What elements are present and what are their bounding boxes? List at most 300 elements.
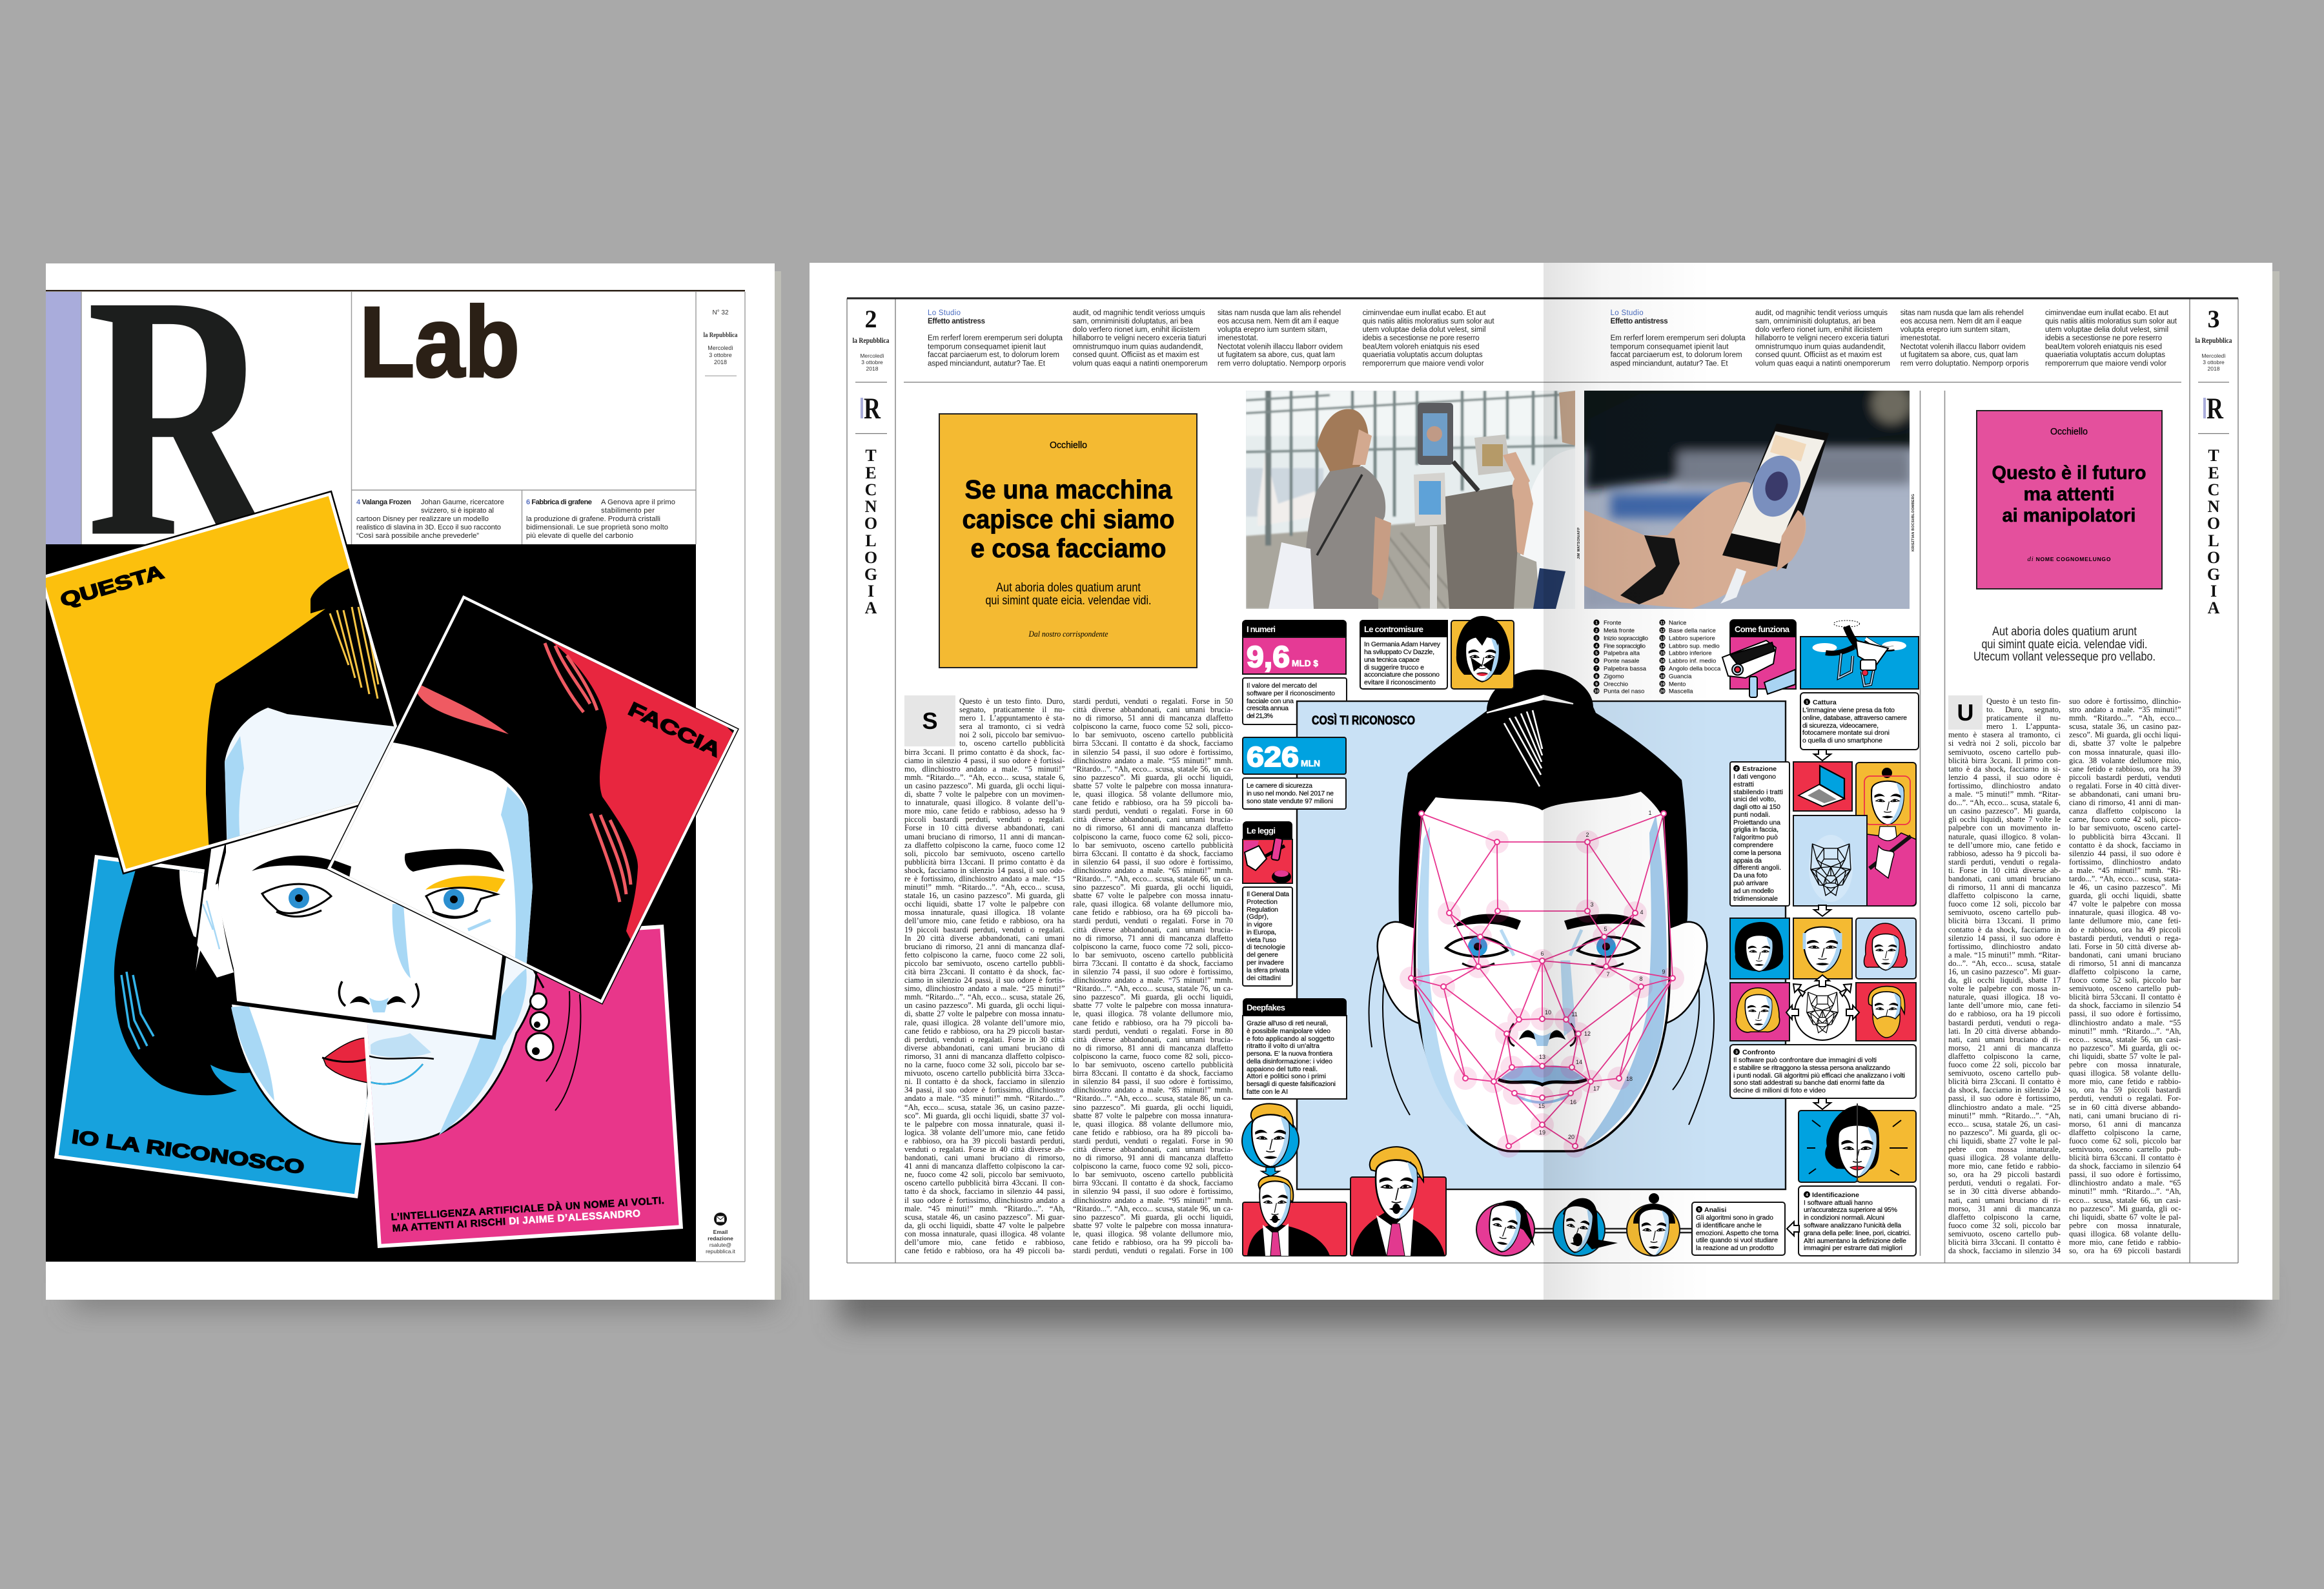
infographic: main panel <box>1297 670 1786 1189</box>
illustration: 3D wireframe <box>1793 815 1867 906</box>
illustration: dazzle face <box>1451 616 1514 689</box>
box: I numeri: software per il riconoscimento <box>1247 690 1335 697</box>
photo credits: JIM WATSON/AFP <box>1577 528 1581 559</box>
drop cap: U: U <box>1957 699 1974 726</box>
box: I numeri: del 21,3% <box>1247 712 1273 720</box>
section label vertical: C <box>2208 480 2219 499</box>
legend: node points: Labbro inferiore <box>1669 650 1712 657</box>
box: step 5 Analisi: emozioni. Aspetto che torna <box>1696 1229 1779 1237</box>
box: step 2 Estrazione: appaia da <box>1733 857 1762 865</box>
text block: Lo Studio right <box>1611 309 2177 368</box>
section label vertical: N <box>2208 497 2220 516</box>
text block: Lo Studio right: rem verro doluptatio. Nemporp orporis <box>1901 360 2029 368</box>
text block: Lo Studio right: asped minciandunt, autatur? Tae. Et <box>1611 360 1728 368</box>
text block: Lo Studio left: dolo verfero rionet ium, enihit iliciistem <box>1073 326 1200 334</box>
box: Deepfakes: persona. E' la nuova frontiera <box>1247 1050 1332 1058</box>
box: step 2 Estrazione: come la persona <box>1733 849 1781 857</box>
legend: node points: 6 <box>1595 659 1598 663</box>
illustration: face with mesh <box>1369 670 1714 1158</box>
box: step 2 Estrazione: unici del volto, <box>1733 795 1776 803</box>
box: step 1 Cattura <box>1800 693 1919 750</box>
legend: node points: 11 <box>1660 620 1665 625</box>
box: step 2 Estrazione: può arrivare <box>1733 879 1768 887</box>
teaser: Valanga Frozen: cartoon Disney per realizzare un modello <box>356 515 489 523</box>
legend: node points: 14 <box>1660 644 1665 648</box>
text block: Lo Studio left: Effetto antistress <box>928 318 985 325</box>
phone <box>1722 424 1829 569</box>
legend: node points: 9 <box>1595 682 1598 686</box>
box: Le contromisure: evitare il riconoscimento <box>1364 679 1436 686</box>
issue info: 3 ottobre <box>709 352 732 358</box>
section label vertical <box>2207 446 2220 617</box>
spine shading <box>1544 263 1711 1300</box>
box: step 2 Estrazione: punti nodali. <box>1733 811 1770 819</box>
text block: Lo Studio right: faccat parciaerum est, to dolorum lorem <box>1611 351 1742 359</box>
text block: Lo Studio right: temporum consequamet ipienit laut <box>1611 343 1729 351</box>
node numbers: 20 <box>1568 1134 1575 1140</box>
legend: node points: 15 <box>1660 651 1665 655</box>
panel: pink headline box: ai manipolatori <box>2003 505 2135 526</box>
box: I numeri: Il valore del mercato del <box>1247 682 1317 690</box>
node numbers: 1 <box>1648 810 1652 816</box>
box: step 4 Identificazione: in condizioni normali. Alcuni <box>1804 1214 1884 1222</box>
legend: node points: 2 <box>1595 628 1598 633</box>
text block: Lo Studio right: quis natiis alitiis moloratius sum solor aut <box>2045 318 2177 325</box>
box: step 3 Confronto: Confronto <box>1742 1049 1775 1056</box>
panel: yellow headline box: Se una macchina <box>964 475 1173 504</box>
illustration: gavel <box>1243 837 1292 883</box>
box: Le contromisure: di suggerire trucco e <box>1364 664 1424 671</box>
text block: Lo Studio right: quaeriatia voluptatis accum doluptas <box>2045 351 2165 359</box>
sidebar: page 3: Mercoledì <box>2201 353 2226 359</box>
card: yellow <box>46 491 397 874</box>
text block: Lo Studio left: volum quas eaqui a natinti onemporerum <box>1073 360 1208 368</box>
legend: node points: Punta del naso <box>1604 688 1644 695</box>
panel: yellow headline box: Occhiello <box>1050 440 1087 451</box>
panel: yellow headline box: e cosa facciamo <box>971 533 1166 563</box>
box: step 3 Confronto: 3 <box>1735 1050 1738 1055</box>
issue info: 2018 <box>714 359 727 365</box>
legend: node points: 16 <box>1660 659 1665 663</box>
section label vertical: A <box>2208 599 2220 617</box>
box: Le leggi: la sfera privata <box>1247 967 1289 974</box>
legend: node points: 18 <box>1660 674 1665 679</box>
box: step 3 Confronto: e stabilire se ritraggono la stessa persona analizzando <box>1733 1064 1890 1072</box>
node numbers: 6 <box>1540 950 1544 957</box>
legend: node points: Labbro sup. medio <box>1669 643 1720 650</box>
legend: node points: Fine sopracciglio <box>1604 643 1646 650</box>
node numbers: 4 <box>1640 909 1644 916</box>
sidebar: page 2: 2018 <box>866 365 879 372</box>
text block: right standfirst <box>1973 625 2156 664</box>
contact: repubblica.it <box>706 1248 736 1255</box>
node numbers: 14 <box>1576 1059 1582 1065</box>
text block: Lo Studio left: sam, omniminisiti doluptatus, ari bea <box>1073 318 1193 325</box>
box: Deepfakes: ritratto il volto di un'altra <box>1247 1042 1320 1050</box>
contact: redazione <box>708 1235 733 1242</box>
node numbers: 7 <box>1606 971 1610 978</box>
legend: node points: Narice <box>1669 620 1686 626</box>
arrow: step 4 to 5 <box>1787 1222 1799 1236</box>
legend: node points: Labbro inf. medio <box>1669 657 1716 665</box>
box: step 2 Estrazione: comprendere <box>1733 841 1773 849</box>
box: Come funziona <box>1722 620 1796 697</box>
legend: node points: Mento <box>1669 681 1686 688</box>
legend: node points: Base della narice <box>1669 628 1716 634</box>
box: step 2 Estrazione: Proiettando una <box>1733 819 1780 826</box>
teaser: Fabbrica di grafene <box>526 498 675 540</box>
illustration: split face <box>1799 1103 1916 1182</box>
text block: Lo Studio left: audit, od magnihic tendit verioss umquis <box>1073 309 1205 317</box>
kiosk <box>1442 483 1522 609</box>
issue info: Mercoledì <box>708 345 733 351</box>
text block: Lo Studio right: consed quunt. Officiist as et maxim est <box>1755 351 1882 359</box>
node numbers: 10 <box>1545 1009 1551 1016</box>
contact: rsalute@ <box>709 1242 731 1248</box>
box: I numeri <box>1242 620 1347 724</box>
text block: Lo Studio left: eos accusa nem. Nem dit am il eaque <box>1218 318 1339 325</box>
box: Le leggi <box>1243 821 1292 986</box>
box: step 5 Analisi: utile quando si vuol studiare <box>1696 1236 1778 1244</box>
box: step 4 Identificazione: immagini per estrarre dati migliori <box>1804 1244 1902 1252</box>
text block: Lo Studio right: sitas nam nusda que lam alis rehendel <box>1901 309 2024 317</box>
drop cap: S: S <box>922 708 937 734</box>
section label vertical: O <box>2207 514 2220 533</box>
section label vertical: I <box>868 582 874 600</box>
body text: right column 2 <box>2069 697 2181 1255</box>
box: step 2 Estrazione: Da una foto <box>1733 872 1768 879</box>
box: 626 mln: Le camere di sicurezza <box>1247 782 1312 790</box>
issue info <box>704 309 738 376</box>
card title: FACCIA <box>625 699 724 761</box>
text block: Lo Studio right: ut fugitatem sa abore, cus, quat lam <box>1901 351 2018 359</box>
box: Come funziona: Come funziona <box>1735 624 1790 634</box>
box: 626 mln: in uso nel mondo. Nel 2017 ne <box>1247 790 1334 797</box>
box: step 3 Confronto: i punti nodali. Gli algoritmi più efficaci che analizzano i volti <box>1733 1072 1905 1080</box>
illustration: Trump on stage right <box>1351 1147 1446 1256</box>
text block: right standfirst: Utecum vollant velesseque pro vellabo. <box>1973 650 2156 664</box>
box: Deepfakes: e foto applicando al soggetto <box>1247 1035 1334 1043</box>
body text: right column 1 <box>1948 697 2061 1255</box>
box: step 4 Identificazione: grana della pelle: linee, pori, cicatrici. <box>1804 1229 1911 1237</box>
text block: Lo Studio left: faccat parciaerum est, to dolorum lorem <box>928 351 1059 359</box>
node numbers: 15 <box>1538 1103 1545 1109</box>
text block: Lo Studio left: volupta erepro ium suntem sitam, <box>1218 326 1327 334</box>
text block: Lo Studio left: consed quunt. Officiist as et maxim est <box>1073 351 1199 359</box>
box: I numeri: I numeri <box>1247 624 1276 634</box>
issue info: N° 32 <box>712 309 729 316</box>
legend: node points: Fronte <box>1604 620 1621 626</box>
box: step 1 Cattura: o quella di uno smartphone <box>1802 737 1882 744</box>
heading: COSÌ TI RICONOSCO <box>1312 713 1415 728</box>
box: step 2 Estrazione: Estrazione <box>1742 765 1777 773</box>
box: step 4 Identificazione: software analizzano l'unicità della <box>1804 1222 1901 1229</box>
body text: left column 2 <box>1073 697 1233 1255</box>
node numbers: 19 <box>1539 1129 1545 1136</box>
legend: node points: 3 <box>1595 636 1598 641</box>
box: Le contromisure: una tecnica capace <box>1364 656 1420 664</box>
legend: node points: Inizio sopracciglio <box>1604 635 1648 642</box>
mesh <box>1411 814 1673 1146</box>
section label vertical: A <box>865 599 877 617</box>
box: step 5 Analisi: la reazione ad un prodotto <box>1696 1244 1774 1252</box>
text block: Lo Studio left: rem verro doluptatio. Nemporp orporis <box>1218 360 1346 368</box>
box: Le leggi: vieta l'uso <box>1247 936 1276 944</box>
sidebar: page 2: Mercoledì <box>860 353 884 359</box>
text block: Lo Studio right: idebis a secestionse ne pore reserro <box>2045 334 2162 342</box>
body text: left column 1 <box>904 697 1065 1255</box>
box: Le leggi: Regulation <box>1247 906 1278 914</box>
box: Deepfakes: Grazie all'uso di reti neurali, <box>1247 1020 1328 1027</box>
text block: Lo Studio right: utem voluptae delia dolut velest, simil <box>2045 326 2168 334</box>
legend: node points: 1 <box>1595 620 1598 625</box>
card: pink <box>355 923 684 1253</box>
illustration: face database row 2 <box>1730 975 1916 1041</box>
box: Le leggi: Protection <box>1247 898 1278 906</box>
page shadows <box>71 271 2279 1324</box>
box: step 2 Estrazione: 2 <box>1735 767 1738 771</box>
teaser: Valanga Frozen: svizzero, si è ispirato al <box>421 507 494 515</box>
box: step 2 Estrazione: l'algoritmo può <box>1733 834 1778 841</box>
text block: Lo Studio left: beaUtem voloreh eniatquis nis esed <box>1363 343 1480 351</box>
box: step 5 Analisi: Gli algoritmi sono in grado <box>1696 1214 1773 1222</box>
teaser: Fabbrica di grafene: bidimensionali. Le sue proprietà sono molto <box>526 524 668 531</box>
section label vertical: G <box>2207 565 2220 584</box>
contact: Email <box>713 1229 728 1235</box>
panel: yellow headline box: qui simint quate eicia. velendae vidi. <box>985 594 1152 608</box>
box: Deepfakes: appaiono del tutto reali. <box>1247 1065 1318 1073</box>
text block: right standfirst: qui simint quate eicia. velendae vidi. <box>1982 638 2147 651</box>
teaser: Valanga Frozen: realistico di slavina in 3D. Ecco il suo racconto <box>356 524 501 531</box>
legend: node points: Orecchio <box>1604 681 1628 688</box>
photo: phone in hand <box>1575 381 1917 609</box>
logo R: R <box>87 223 276 610</box>
box: Le leggi: (Gdpr), <box>1247 913 1269 921</box>
card title: QUESTA <box>58 562 167 611</box>
box: step 4 Identificazione: 4 <box>1806 1193 1808 1197</box>
box: Le leggi: dei cittadini <box>1247 974 1281 982</box>
text block: Lo Studio right: volupta erepro ium suntem sitam, <box>1901 326 2010 334</box>
teaser: Valanga Frozen: “Così sarà possibile anche prevederle” <box>356 532 479 540</box>
box: step 1 Cattura: online, database, attraverso camere <box>1802 714 1907 722</box>
box: step 1 Cattura: Cattura <box>1813 699 1837 706</box>
legend: node points: 8 <box>1595 674 1598 679</box>
teaser: Fabbrica di grafene: A Genova apre il primo <box>601 498 675 506</box>
box: I numeri: crescita annua <box>1247 704 1289 712</box>
photo: airport kiosk <box>1246 391 1575 609</box>
contact <box>706 1213 735 1254</box>
text block: Lo Studio right: ciminvendae eum inullat ecabo. Et aut <box>2045 309 2169 317</box>
box: step 4 Identificazione: I software attuali hanno <box>1804 1199 1873 1207</box>
logo Lab: Lab <box>360 286 520 398</box>
legend: node points <box>1593 619 1721 695</box>
section label vertical: L <box>865 531 877 550</box>
box: Deepfakes: bersagli di queste falsificazioni <box>1247 1080 1336 1088</box>
section label vertical: O <box>2207 548 2220 567</box>
box: Le contromisure <box>1360 616 1514 689</box>
cover illustration <box>32 484 775 1262</box>
sidebar: page 3: R <box>2207 392 2224 425</box>
card: red <box>327 595 739 1005</box>
section label vertical: G <box>864 565 877 584</box>
text block: Lo Studio right: Nectotat volenih illaccu llaborr ovidem <box>1901 343 2026 351</box>
panel: yellow headline box <box>939 414 1197 668</box>
legend: node points: Ponte nasale <box>1604 657 1639 665</box>
box: I numeri: facciale con una <box>1247 697 1294 705</box>
node numbers <box>1538 810 1666 1140</box>
card: blue <box>54 855 369 1198</box>
cover headline: L’INTELLIGENZA ARTIFICIALE DÀ UN NOME AI VOLTI. <box>391 1195 664 1223</box>
text block: Lo Studio right: eos accusa nem. Nem dit am il eaque <box>1901 318 2022 325</box>
node numbers: 2 <box>1585 832 1589 838</box>
box: step 3 Confronto <box>1730 1045 1916 1098</box>
node numbers: 13 <box>1539 1054 1545 1060</box>
teaser: Fabbrica di grafene: la produzione di grafene. Produrrà cristalli <box>526 515 660 523</box>
legend: node points: 10 <box>1594 689 1599 693</box>
officer <box>1520 449 1575 609</box>
box: 626 mln: 626 <box>1247 741 1299 773</box>
section label vertical: T <box>2208 446 2219 465</box>
box: step 5 Analisi: Analisi <box>1704 1206 1727 1214</box>
box: step 2 Estrazione: I dati vengono <box>1733 773 1776 781</box>
text block: Lo Studio right: sam, omniminisiti doluptatus, ari bea <box>1755 318 1876 325</box>
box: Deepfakes <box>1243 998 1347 1099</box>
teaser: Fabbrica di grafene: più elevate di quelle del carbonio <box>526 532 633 540</box>
card: centre nose <box>196 807 506 1040</box>
woman <box>1317 409 1369 475</box>
legend: node points: Zigomo <box>1604 673 1624 681</box>
illustration: emotion faces <box>1476 1193 1692 1256</box>
box: step 1 Cattura: L'immagine viene presa da foto <box>1802 706 1895 714</box>
box: Le leggi: Il General Data <box>1247 890 1289 898</box>
text block: Lo Studio right: imenestotat. <box>1901 334 1941 342</box>
box: Deepfakes: Attori e politici sono i primi <box>1247 1072 1326 1080</box>
node numbers: 11 <box>1571 1011 1578 1018</box>
box: step 4 Identificazione: Altri aumentano la definizione delle <box>1804 1237 1906 1245</box>
box: Deepfakes: Deepfakes <box>1247 1003 1285 1012</box>
text block: Lo Studio left: asped minciandunt, autatur? Tae. Et <box>928 360 1046 368</box>
text block: Lo Studio left: quaeriatia voluptatis accum doluptas <box>1363 351 1483 359</box>
legend: node points: Guancia <box>1669 673 1692 681</box>
box: step 1 Cattura: di sicurezza, videocamere, <box>1802 722 1879 730</box>
illustration: woman framed <box>1856 763 1916 906</box>
box: step 2 Estrazione <box>1730 762 1789 906</box>
section label vertical: C <box>865 480 877 499</box>
node numbers: 17 <box>1593 1085 1600 1092</box>
node numbers: 8 <box>1639 976 1643 982</box>
box: step 2 Estrazione: stabilendo i tratti <box>1733 788 1783 796</box>
sidebar: page 3: 3 ottobre <box>2203 359 2225 365</box>
photo credits <box>1577 494 1915 559</box>
section label vertical: I <box>2210 582 2217 600</box>
box: step 2 Estrazione: differenti angoli. <box>1733 864 1781 872</box>
section label vertical: L <box>2208 531 2219 550</box>
panel: pink headline box: ma attenti <box>2023 484 2115 505</box>
text block: Lo Studio left: omnistrumquo inum quias audandendit, <box>1073 343 1203 351</box>
text block: Lo Studio left: Nectotat volenih illaccu llaborr ovidem <box>1218 343 1343 351</box>
box: Deepfakes: della disinformazione: i video <box>1247 1058 1332 1065</box>
text block: Lo Studio left: idebis a secestionse ne pore reserro <box>1363 334 1480 342</box>
box: step 4 Identificazione <box>1799 1186 1916 1256</box>
text block: Lo Studio left <box>928 309 1494 368</box>
box: step 4 Identificazione: un'accuratezza superiore al 95% <box>1804 1206 1897 1214</box>
node numbers: 5 <box>1604 926 1607 932</box>
arrow: step 2 to faces <box>1814 905 1831 916</box>
node numbers: 3 <box>1590 901 1594 908</box>
text block: right standfirst: Aut aboria doles quatium arunt <box>1992 625 2137 639</box>
panel: pink headline box: di NOME COGNOMELUNGO <box>2027 555 2111 563</box>
box: 626 mln: sono state vendute 97 milioni <box>1247 797 1333 805</box>
text block: Lo Studio right: omnistrumquo inum quias audandendit, <box>1755 343 1886 351</box>
text block: Lo Studio left: utem voluptae delia dolut velest, simil <box>1363 326 1486 334</box>
box: Le leggi: del genere <box>1247 951 1278 959</box>
drop cap: U <box>1948 695 1983 730</box>
text block: Lo Studio right: Effetto antistress <box>1611 318 1668 325</box>
node numbers: 18 <box>1626 1076 1633 1082</box>
icon: mesh hub with arrows <box>1786 975 1859 1040</box>
nodal halos <box>1400 830 1684 1158</box>
box: 626 mln <box>1243 737 1346 809</box>
box: step 2 Estrazione: estratti <box>1733 781 1754 788</box>
sidebar: page 3: 3 <box>2208 305 2219 333</box>
teaser: Fabbrica di grafene: stabilimento per <box>601 507 655 515</box>
issue info: la Repubblica <box>704 331 738 339</box>
illustration: laptop <box>1793 762 1852 811</box>
box: step 3 Confronto: decine di milioni di foto e video <box>1733 1087 1826 1094</box>
sidebar: page 2: 3 ottobre <box>861 359 883 365</box>
illustration: Trump face in circle <box>1242 1103 1299 1176</box>
sidebar: page 3: 2018 <box>2208 365 2220 372</box>
legend: node points: 13 <box>1660 636 1665 641</box>
box: step 1 Cattura: fotocamere montate sui droni <box>1802 729 1890 737</box>
section label vertical: T <box>865 446 877 465</box>
text block: Lo Studio right: Em rerferf lorem eremperum seri dolupta <box>1611 334 1746 342</box>
box: Deepfakes: è possibile manipolare video <box>1247 1027 1330 1035</box>
box: step 5 Analisi <box>1692 1202 1785 1255</box>
box: Le leggi: Le leggi <box>1247 826 1276 836</box>
text block: Lo Studio left: remporerrum que maiore vendi volor <box>1363 360 1484 368</box>
text block: Lo Studio left: ciminvendae eum inullat ecabo. Et aut <box>1363 309 1486 317</box>
legend: node points: 12 <box>1660 628 1665 633</box>
text block: Lo Studio right: audit, od magnihic tendit verioss umquis <box>1755 309 1888 317</box>
section label vertical <box>864 446 877 617</box>
text block: Lo Studio right: hillaborro te veligni necero exceria tiaturi <box>1755 334 1889 342</box>
sidebar: page 2: R <box>864 392 881 425</box>
text block: Lo Studio right: Lo Studio <box>1611 309 1644 317</box>
box: step 5 Analisi: di identificare anche le <box>1696 1222 1762 1229</box>
text block: Lo Studio left: ut fugitatem sa abore, cus, quat lam <box>1218 351 1335 359</box>
icon: security camera <box>1722 641 1795 697</box>
legend: node points: 19 <box>1660 682 1665 686</box>
text block: Lo Studio right: beaUtem voloreh eniatquis nis esed <box>2045 343 2162 351</box>
box: Le leggi: per invadere <box>1247 959 1284 967</box>
legend: node points: 7 <box>1595 666 1598 671</box>
sidebar: page 2: 2 <box>865 305 877 333</box>
panel: pink headline box: Questo è il futuro <box>1992 462 2146 484</box>
legend: node points: Palpebra bassa <box>1604 665 1647 673</box>
legend: node points: Angolo della bocca <box>1669 665 1721 673</box>
section label vertical: O <box>864 548 877 567</box>
box: 626 mln: MLN <box>1301 758 1320 768</box>
text block: Lo Studio right: volum quas eaqui a natinti onemporerum <box>1755 360 1890 368</box>
legend: node points: Palpebra alta <box>1604 650 1640 657</box>
legend: node points: Metà fronte <box>1604 628 1635 634</box>
legend: node points: Labbro superiore <box>1669 635 1715 642</box>
card title: IO LA RICONOSCO <box>70 1126 305 1178</box>
text block: Lo Studio left: Em rerferf lorem eremperum seri dolupta <box>928 334 1063 342</box>
box: step 2 Estrazione: ad un modello <box>1733 887 1774 895</box>
box: Deepfakes: fatte con le AI <box>1247 1088 1288 1096</box>
